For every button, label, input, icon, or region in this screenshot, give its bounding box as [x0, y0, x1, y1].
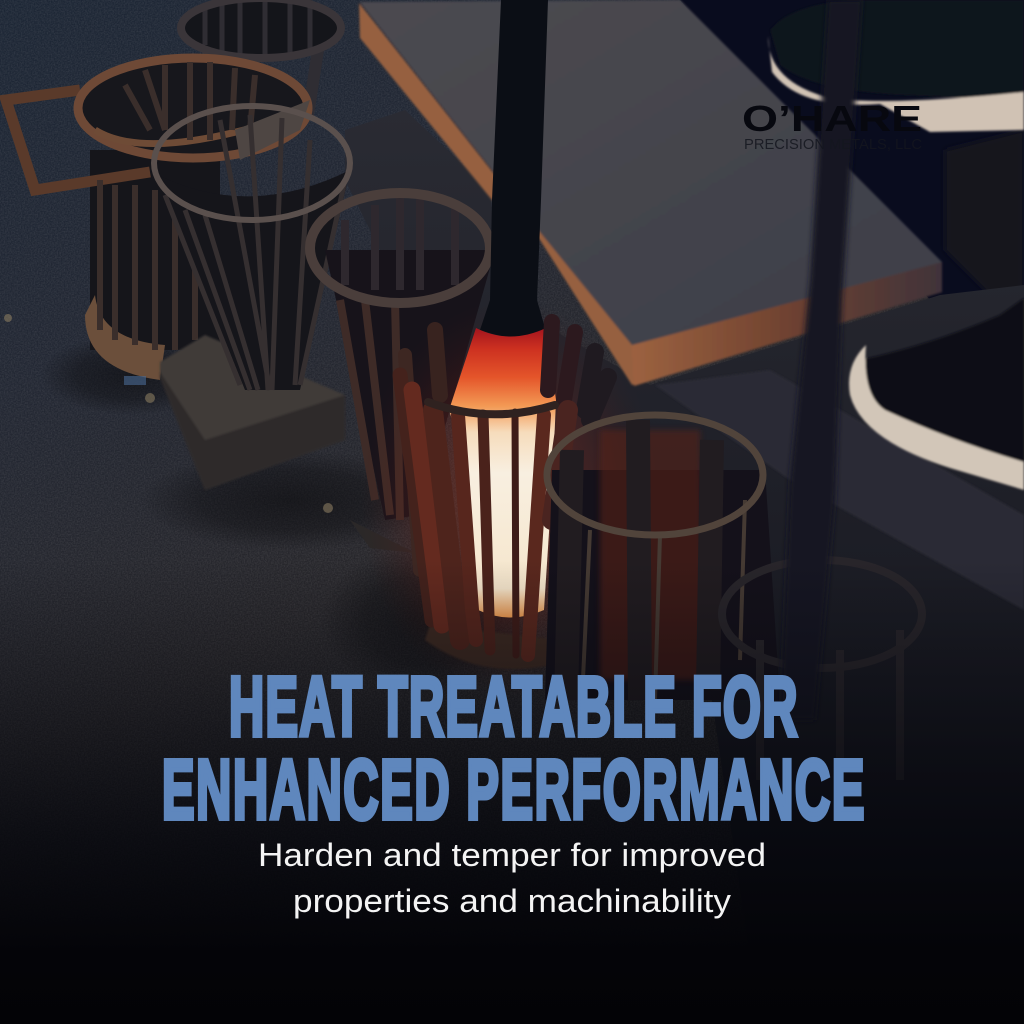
title: ENHANCED PERFORMANCE	[162, 743, 864, 837]
front cage bars	[412, 390, 568, 655]
company logo: PRECISION METALS, LLC	[744, 137, 922, 153]
wooden block under cone cage	[160, 335, 345, 490]
glowing hot metal	[449, 328, 556, 618]
red ember glow	[360, 300, 660, 700]
lower wooden bench	[345, 110, 1024, 1024]
floor shadows	[40, 335, 540, 695]
cage back bars, left	[400, 330, 440, 620]
top right shoe	[768, 0, 1024, 132]
bottom dark gradient overlay	[0, 560, 1024, 1024]
title: HEAT TREATABLE FOR	[229, 660, 797, 754]
company logo: O’HARE	[742, 98, 922, 139]
dark upper right background	[680, 0, 1024, 300]
title	[162, 660, 864, 837]
lower right shoe	[849, 298, 1024, 490]
cage with handle	[6, 58, 310, 380]
cone cage	[154, 106, 350, 390]
back cage top left	[181, 0, 341, 115]
subtitle	[258, 837, 766, 919]
blurred foreground post	[780, 0, 862, 720]
small debris spots	[4, 314, 333, 513]
black forging rod	[480, 0, 548, 337]
cage back bars, right	[548, 322, 608, 420]
wood bench side right	[655, 370, 1024, 610]
company logo	[742, 98, 922, 153]
subtitle: Harden and temper for improved	[258, 837, 766, 873]
right foreground cage	[545, 415, 780, 700]
top plank	[359, 0, 942, 386]
cage behind glowing piece	[310, 193, 495, 553]
front cage base	[425, 625, 560, 669]
far right faint cage	[722, 560, 922, 800]
subtitle: properties and machinability	[293, 883, 731, 919]
